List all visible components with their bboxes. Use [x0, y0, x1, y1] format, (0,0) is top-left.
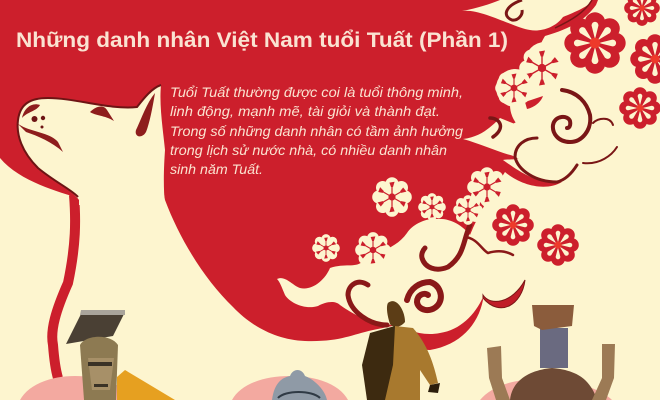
- dog mouth: [17, 123, 63, 152]
- lower cloud: [277, 219, 525, 334]
- dog ear inner: [136, 93, 155, 136]
- intro text: trong lịch sử nước nhà, có nhiều danh nhân: [170, 142, 447, 158]
- intro text: sinh năm Tuất.: [170, 161, 263, 177]
- dog head: [17, 85, 165, 205]
- red background shape: [0, 0, 598, 350]
- statue: silver figure: [272, 370, 327, 400]
- top cloud: [462, 0, 660, 60]
- statue: king on throne: [487, 305, 615, 400]
- neck ribbon: [52, 195, 75, 378]
- red leaf on cloud: [525, 96, 543, 109]
- intro text: linh động, mạnh mẽ, tài giỏi và thành đạt.: [170, 103, 440, 119]
- statue: warrior: [362, 301, 440, 400]
- pink circles: [20, 376, 612, 400]
- middle cloud: [463, 37, 660, 200]
- intro text: Trong số những danh nhân có tầm ảnh hưởng: [170, 123, 463, 139]
- dog nose: [22, 104, 40, 118]
- red crescent under cloud: [483, 280, 525, 308]
- dog eye: [90, 106, 114, 121]
- cloud spirals: [490, 90, 617, 182]
- title: Những danh nhân Việt Nam tuổi Tuất (Phần 1): [16, 29, 508, 52]
- cream flowers: [312, 45, 565, 268]
- lower cloud spirals: [348, 225, 513, 325]
- statue: man with scroll: [66, 310, 175, 400]
- intro text: Tuổi Tuất thường được coi là tuổi thông minh,: [170, 84, 463, 100]
- intro text: [170, 84, 463, 177]
- red flowers: [492, 0, 660, 266]
- dog nostrils: [32, 116, 45, 128]
